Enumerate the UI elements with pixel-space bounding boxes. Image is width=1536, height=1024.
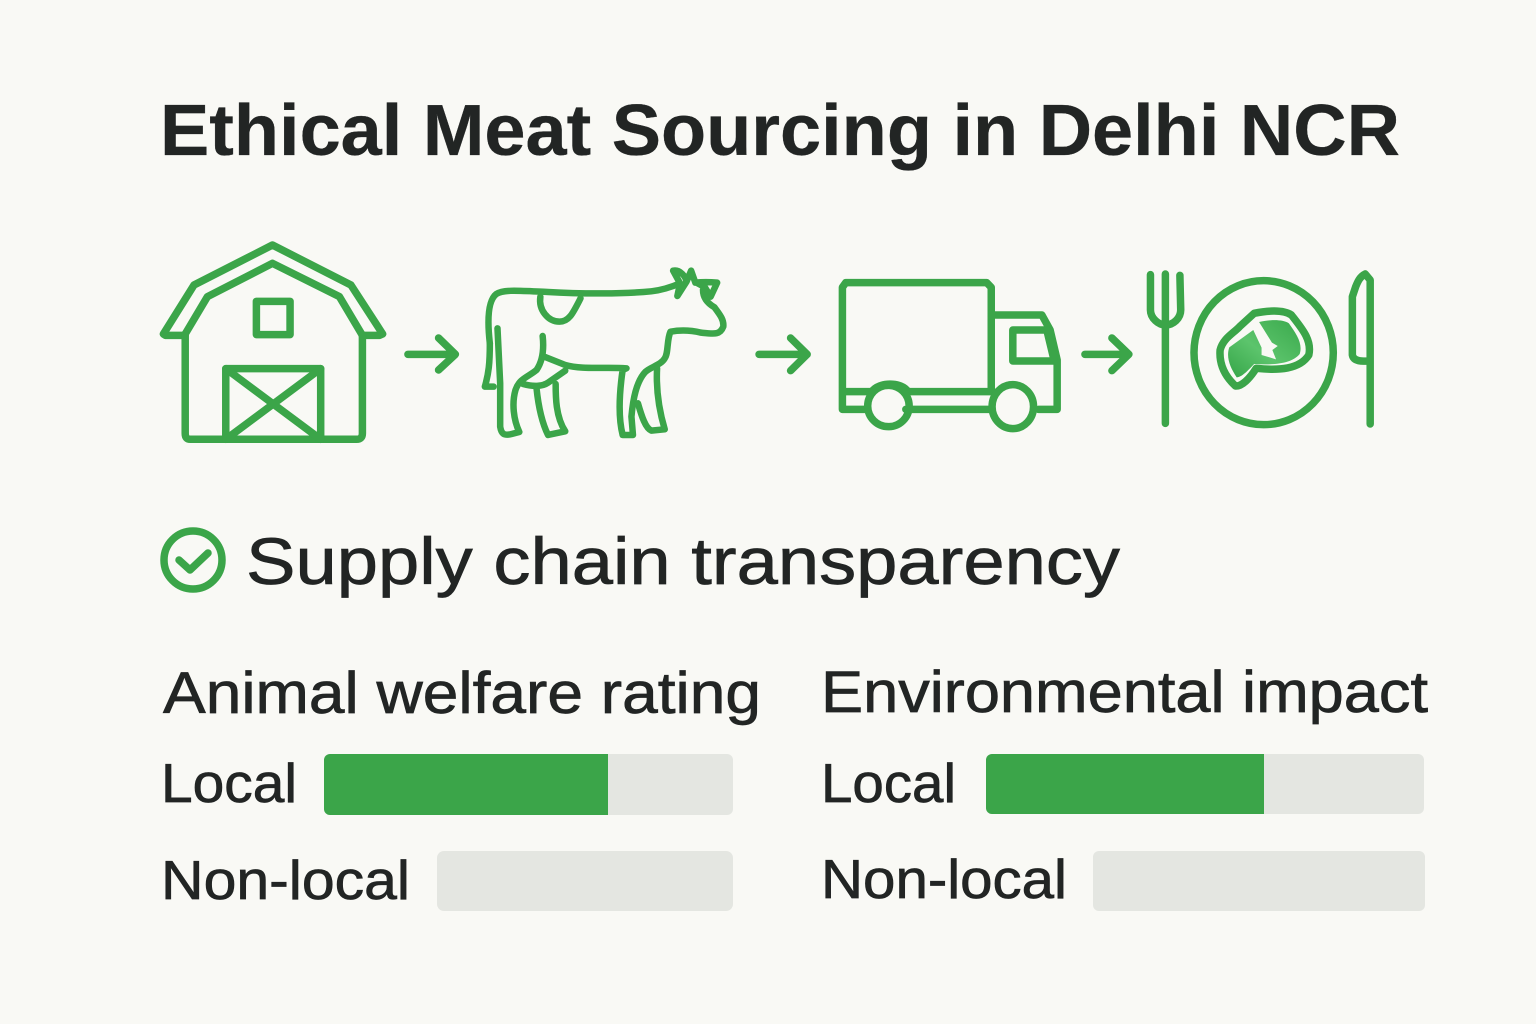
- heading: Environmental impact: [821, 660, 1428, 725]
- bar: non-local: [437, 851, 733, 911]
- icon: truck: [842, 283, 1057, 429]
- supply chain flow: [163, 245, 1370, 439]
- label: local: Local: [161, 752, 297, 814]
- icon: fork: [1150, 274, 1181, 423]
- icon: barn: [163, 245, 383, 439]
- transparency row: [164, 524, 1120, 598]
- icon: cow: [485, 271, 723, 435]
- icon: knife: [1352, 274, 1370, 424]
- title: Ethical Meat Sourcing in Delhi NCR: [160, 91, 1400, 171]
- arrow: barn to cow: [408, 338, 455, 370]
- icon: check circle: [164, 531, 222, 589]
- icon: plate with steak: [1194, 281, 1333, 425]
- transparency label: Supply chain transparency: [246, 524, 1120, 598]
- bar: local: [986, 754, 1424, 814]
- arrow: cow to truck: [759, 338, 807, 371]
- label: local: Local: [821, 752, 956, 814]
- bar: non-local: [1093, 851, 1425, 911]
- panel: environmental impact: [821, 660, 1428, 911]
- arrow: truck to plate: [1085, 338, 1129, 371]
- label: non-local: Non-local: [821, 848, 1067, 910]
- heading: Animal welfare rating: [163, 661, 761, 726]
- panel: animal welfare rating: [161, 661, 761, 911]
- bar: local: [324, 754, 733, 815]
- label: non-local: Non-local: [161, 849, 410, 911]
